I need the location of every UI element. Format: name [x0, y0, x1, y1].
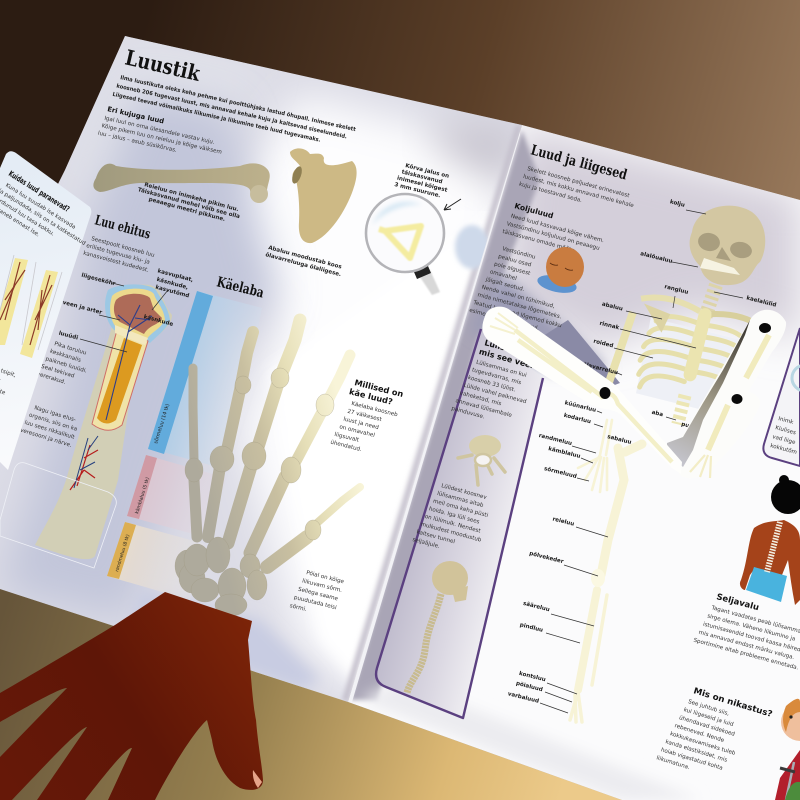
- panel: right partial purple box: Inimk: [777, 416, 795, 426]
- text: Millised on käe luud: on omavahel: [339, 424, 376, 439]
- panel: right page: [348, 125, 800, 800]
- text: spine note: Lülidest koosnev: [440, 483, 488, 501]
- text: living organ note: veresooni ja närve.: [19, 428, 72, 449]
- text: spine intro: painduvuse.: [451, 406, 485, 421]
- text: thumb note: Pöial on kõige: [306, 570, 345, 585]
- text: Mis on nikastus: ühendavad sidekoed: [678, 715, 736, 738]
- text: spine note: on lülimulk. Nendest: [424, 514, 482, 535]
- text: newborn skull note: Vastsündinu: [501, 246, 536, 261]
- panel: right partial purple box: Kiulises: [774, 425, 797, 436]
- caption: ear bone: inimesel kõigest: [396, 175, 448, 194]
- text: right intro: kuju ja toestavad seda.: [518, 182, 583, 204]
- illustration: child with crutch: [775, 699, 800, 800]
- labels: skeleton: varbaluud: [507, 691, 539, 705]
- labels: skeleton: puusaluu: [680, 422, 710, 434]
- labels: skeleton: [507, 199, 777, 713]
- text: Koljuluud: Koljuluud: [513, 201, 554, 220]
- illustration: baby head: [536, 247, 584, 296]
- text: Seljavalu: istumisasendid toovad kaasa häired,: [702, 622, 800, 654]
- text: right intro: Skelett koosneb paljudest erinevatest: [526, 166, 631, 199]
- labels: skeleton: pöialuud: [515, 681, 543, 693]
- labels: skeleton: kodarluu: [563, 413, 591, 425]
- labels: skeleton: reieluu: [552, 516, 575, 528]
- labels: skeleton: roided: [593, 339, 614, 349]
- text: Mis on nikastus: See juhtub siis,: [687, 699, 730, 717]
- text: newborn skull note: jäigalt seotud.: [484, 277, 525, 293]
- text: newborn skull note: Teatud kasvavad lõgemed kokku: [472, 300, 563, 330]
- hole: [759, 323, 771, 333]
- text: Millised on käe luud: liigsuvalt: [334, 432, 360, 444]
- text: spine note: seljaäjule.: [412, 537, 441, 550]
- panel: fold-out card: [0, 151, 91, 470]
- text: Eri kujuga luud: luu – jalus – asub süsikõrvas.: [97, 131, 178, 154]
- illustration: healing bones: [0, 255, 62, 358]
- text: spine note: kaitsev tunnel: [416, 529, 456, 545]
- labels: skeleton: sabaluu: [607, 434, 632, 446]
- text: newborn skull note: Nende vahel on tühimikud,: [481, 285, 556, 310]
- text: spine intro: tugevdvarras, mis: [471, 367, 522, 386]
- illustration: shoulder blade: [290, 148, 357, 243]
- text: long bone note: vererakud.: [36, 371, 67, 386]
- text: Mis on nikastus: liikumatuna.: [655, 755, 691, 771]
- icon: magnifying glass: [366, 194, 444, 295]
- labels: skeleton: õlavarreluu: [582, 362, 619, 376]
- text: Millised on käe luud: luust ja need: [343, 417, 380, 431]
- illustration: person with back pain: [740, 475, 800, 605]
- caption: shoulder blade: Abaluu moodustab koos: [267, 245, 343, 271]
- text: newborn skull note: omavahel: [489, 269, 518, 282]
- text: newborn skull note: esimese eluaasta jooksul.: [468, 308, 540, 332]
- panel: right partial purple box: kokkutõm: [769, 443, 797, 456]
- pelvis and leg: [570, 444, 642, 722]
- text: spine note: hoida. Iga lüli sees: [428, 506, 480, 526]
- heading: Luu ehitus: Luu ehitus: [93, 212, 152, 243]
- text: long bone note: Pika toruluu: [53, 341, 87, 357]
- text: Millised on käe luud: [330, 375, 405, 460]
- text: Koljuluud: Need luud kasvavad kõige vähem.: [510, 214, 605, 244]
- illustration: bone structure: [35, 284, 172, 559]
- pocket slot: [0, 463, 116, 568]
- arrow: to magnifier: [444, 199, 461, 210]
- illustration: hand skeleton: [175, 320, 360, 616]
- text: Mis on nikastus: kui liigeseid ja luid: [683, 707, 734, 728]
- labels: bone structure: kasvutõmd: [155, 285, 190, 299]
- text: Eri kujuga luud: Kõige pikem luu on reieluu ja kõige väiksem: [101, 123, 222, 156]
- text: card body: [0, 178, 91, 262]
- labels: skeleton: põlvekeder: [528, 551, 564, 565]
- text: Millised on käe luud: Millised on: [354, 377, 405, 399]
- heading: Kuidas luud paranevad: Kuidas luud paranevad?: [7, 169, 71, 214]
- text: living organ note: Nagu igas elus-: [33, 405, 76, 424]
- labels: bone structure: käsnkude: [143, 314, 174, 328]
- illustration: cut-out hand: [0, 592, 263, 800]
- illustration: skull and spine: [407, 561, 468, 693]
- text: Koljuluud: täiskasvanu omade mõõtu.: [502, 229, 577, 254]
- text: Millised on käe luud: ühendatud.: [330, 440, 362, 453]
- text: spine intro: Lülide vahel paiknevad: [463, 383, 527, 405]
- caption: shoulder blade: õlavarreluuga õlaliigese.: [265, 252, 342, 278]
- text: long bone note: paikneb luuüdi.: [45, 356, 88, 375]
- text: spine intro: Lülisammas on kui: [475, 360, 528, 379]
- text: spine intro: annavad lülisambale: [455, 398, 513, 419]
- text: newborn skull note: pealuu osad: [497, 254, 532, 269]
- text: Mis on nikastus: kokkukasvamiseks tuleb: [669, 731, 736, 757]
- panel: right partial purple box: vad liige: [771, 434, 796, 446]
- upper arm: [607, 312, 633, 388]
- text: Seljavalu: sirge olema. Vähene liikumine ja: [706, 613, 796, 643]
- labels: bone structure: kasvuplaat,: [157, 268, 194, 284]
- skull: [690, 206, 765, 285]
- labels: bone structure: veen ja arter: [62, 300, 103, 316]
- text: thumb note: puudutada teisi: [293, 595, 338, 611]
- text: spine note: mulkudest moodustub: [420, 522, 482, 544]
- labels: skeleton: rinnak: [599, 321, 620, 331]
- labels: bone structure: [58, 268, 194, 352]
- labels: bone structure: käsnkude,: [156, 277, 189, 291]
- labels: skeleton: kolju: [669, 199, 685, 209]
- color bands: hand chart: kämblaluu (5 tk): [134, 476, 151, 515]
- labels: skeleton: rangluu: [664, 284, 689, 296]
- caption: femur: Täiskasvanud mehel võib see olla: [137, 187, 241, 220]
- text: card note: [0, 363, 17, 417]
- text: spine note: lülisammas aitab: [436, 491, 484, 509]
- flap: upper arm right: [667, 310, 786, 478]
- text: spine intro: Lülisammas –: [483, 338, 544, 362]
- text: Mis on nikastus: kanda elastiksidet, mis: [665, 739, 728, 764]
- text: Seljavalu: Seljavalu: [715, 592, 760, 613]
- color bands: hand chart: randmeluu (8 tk): [114, 534, 131, 573]
- labels: skeleton: aba: [651, 410, 664, 418]
- labels: skeleton: alalõualuu: [640, 251, 673, 265]
- caption: ear bone: Kõrva jalus on: [405, 163, 450, 180]
- panel: right partial purple box: [763, 328, 800, 466]
- text: Koljuluud: [502, 200, 608, 261]
- labels: skeleton: randmeluu: [538, 433, 572, 447]
- illustration: skeleton: [570, 206, 769, 722]
- wrist and fingers: [578, 420, 612, 492]
- text: Seljavalu: Sportimine aitab probleeme ennetada.: [693, 638, 799, 672]
- text: living organ note: [19, 403, 81, 449]
- heading: Luud ja liigesed: Luud ja liigesed: [529, 142, 629, 184]
- text: thumb note: sõrmi.: [289, 603, 308, 613]
- labels: skeleton: sõrmeluud: [543, 466, 577, 480]
- text: spine intro: koosneb 33 lülist.: [467, 375, 516, 394]
- text: long bone note: keskkanalis: [49, 349, 82, 364]
- text: card body: Kuna luu suudab ise kasvada: [4, 183, 76, 231]
- text: spine intro: mis see veel on?: [478, 347, 553, 375]
- text: intro: koosneb 206 tugevast luust, mis annavad kehale kuju ja kaitsevad siseelundeid.: [116, 83, 347, 140]
- text: living organ note: luu sees rikkalikult: [24, 420, 76, 441]
- caption: ear bone: 3 mm suurune.: [394, 182, 441, 199]
- text: newborn skull note: mida nimetatakse lõgemeteks.: [477, 292, 562, 321]
- text: spine intro: vaheketad, mis: [459, 390, 502, 407]
- caption: ear bone: täiskasvanud: [401, 169, 443, 185]
- text: Millised on käe luud: 27 väikesest: [347, 409, 383, 423]
- text: newborn skull note: [468, 242, 578, 338]
- caption: femur: [135, 181, 242, 227]
- hole: [732, 394, 742, 404]
- illustration: femur bone: [93, 163, 270, 203]
- caption: femur: Reieluu on inimkeha pikim luu.: [143, 182, 239, 213]
- text: thumb note: [289, 568, 345, 620]
- text: Koljuluud: Vastsündinu koljuluud on peaaegu: [506, 221, 601, 252]
- text: spine intro: [451, 334, 555, 434]
- text: spine note: [412, 480, 494, 560]
- flap: forearm left: [482, 307, 682, 474]
- text: Luu ehitus intro: [82, 235, 155, 274]
- color bands: hand chart: sõrmeluu (14 tk): [153, 403, 171, 445]
- text: Luu ehitus intro: kanasvoistest kudedest.: [82, 251, 150, 274]
- labels: skeleton: kaelalülid: [746, 295, 777, 309]
- text: Seljavalu: [693, 589, 800, 672]
- labels: skeleton: kämblaluu: [548, 446, 581, 460]
- text: living organ note: organis, siis on ka: [28, 412, 78, 433]
- heading: Käelaba: Käelaba: [215, 274, 265, 301]
- heading: Luustik: Luustik: [123, 45, 203, 86]
- text: right intro: [518, 165, 637, 218]
- neck vertebrae: [705, 285, 716, 318]
- text: Eri kujuga luud: [97, 104, 226, 164]
- caption: femur: peaaegu meetri pikkune.: [148, 197, 226, 223]
- text: Mis on nikastus: rebenevad. Nende: [674, 723, 725, 744]
- text: intro: Liigesed teevad võimalikuks liikumise ja liikumine teeb luud tugevamaks.: [112, 92, 321, 144]
- text: thumb note: liikuvam sõrm.: [301, 578, 343, 594]
- hole: [600, 387, 610, 399]
- text: Seljavalu: mis annavad endast märku valuga.: [698, 630, 795, 661]
- labels: skeleton: pindluu: [519, 622, 544, 634]
- decoration: pale blue circle edge: [455, 225, 489, 269]
- text: spine note: meil oma keha püsti: [432, 499, 489, 519]
- text: thumb note: Sellega saame: [297, 587, 339, 602]
- labels: skeleton: küünarluu: [564, 400, 597, 414]
- text: Mis on nikastus: [655, 682, 774, 790]
- panel: spine column: [376, 329, 555, 718]
- text: Mis on nikastus: hoiab vigastatud kohta: [660, 747, 723, 772]
- text: Eri kujuga luud: Eri kujuga luud: [107, 105, 165, 126]
- labels: skeleton: sääreluu: [522, 601, 550, 613]
- text: newborn skull note: pole algusest: [493, 262, 532, 277]
- panel: left page: [0, 36, 522, 702]
- labels: skeleton: abaluu: [601, 302, 623, 313]
- text: Millised on käe luud: käe luud?: [348, 386, 394, 407]
- labels: bone structure: luuüdi: [58, 331, 79, 342]
- text: long bone note: [36, 339, 93, 391]
- text: Luu ehitus intro: Seestpoolt koosneb luu: [90, 236, 155, 259]
- color bands: hand chart: [107, 291, 262, 600]
- text: Millised on käe luud: Käelaba koosneb: [351, 401, 399, 418]
- text: long bone note: Seal tekivad: [40, 364, 75, 380]
- text: right intro: luudest, mis kokku annavad meie kehale: [522, 174, 635, 209]
- text: Luu ehitus intro: eriliste tugevuse kiu- ja: [86, 243, 150, 266]
- labels: bone structure: liigesekõhr: [81, 273, 116, 288]
- labels: skeleton: kontsluu: [518, 671, 546, 683]
- text: intro: Ilma luustikuta oleks keha pehme kui poolttühjaks lastud õhupall. Inimese skelett: [120, 75, 356, 133]
- text: Eri kujuga luud: Igal luul on oma ülesandele vastav kuju.: [104, 116, 215, 146]
- ribcage: [614, 292, 769, 440]
- caption: ear bone: [394, 162, 451, 201]
- illustration: vertebra: [458, 435, 505, 485]
- text: Mis on nikastus: Mis on nikastus?: [692, 686, 774, 720]
